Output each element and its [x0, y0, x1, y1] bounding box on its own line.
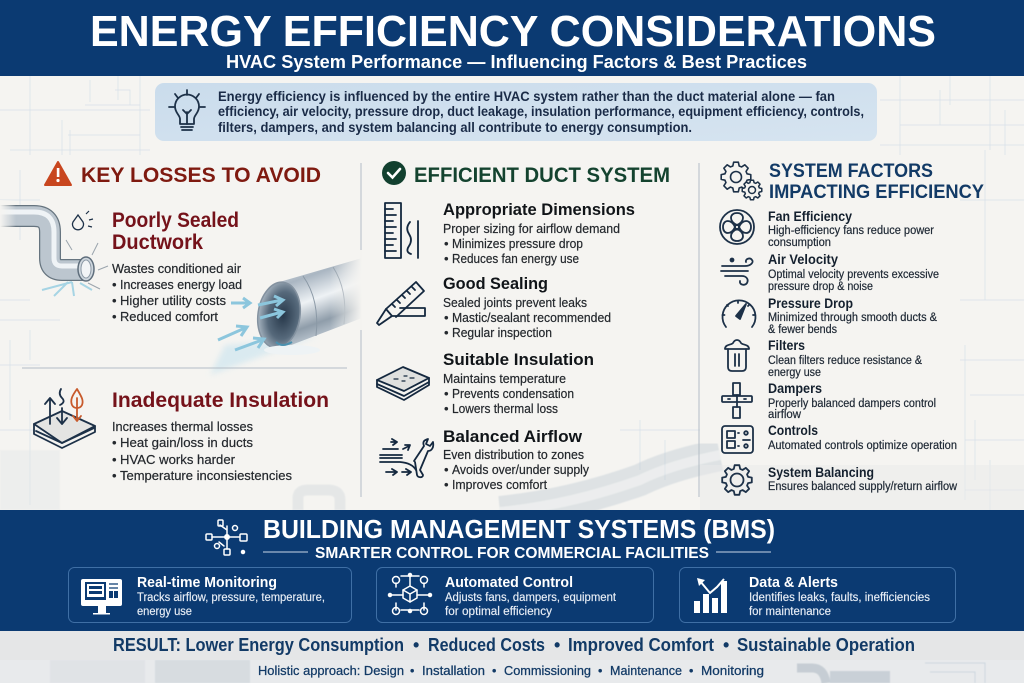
text: fan efficiency: Fan Efficiency [768, 209, 852, 224]
icon: automation network [388, 574, 432, 614]
text: fan efficiency [768, 209, 934, 249]
text: air velocity [768, 252, 939, 293]
result band: • [723, 635, 729, 655]
text: good sealing: Mastic/sealant recommended [452, 310, 611, 325]
heading: efficient duct system: EFFICIENT DUCT SYSTEM [414, 164, 670, 187]
text: balanced airflow: • [444, 462, 449, 477]
text: pressure drop: & fewer bends [768, 324, 837, 336]
text: inadequate insulation: • [112, 452, 117, 467]
text: suitable insulation: • [444, 401, 449, 416]
text: suitable insulation: Lowers thermal loss [452, 401, 558, 416]
heading: system factors impacting efficiency: IMPACTING EFFICIENCY [769, 181, 984, 203]
text: dampers: Dampers [768, 381, 822, 396]
card: automated control [376, 568, 654, 622]
icon: filter bin [725, 340, 749, 371]
text: appropriate dimensions: Appropriate Dimensions [443, 200, 635, 219]
text: filters: Filters [768, 338, 805, 353]
icon: insulation layers with heat arrows [34, 389, 95, 448]
text: controls [768, 423, 957, 452]
text: balanced airflow: Avoids over/under supply [452, 462, 589, 477]
icon: damper [722, 383, 752, 418]
text: filters [768, 338, 922, 379]
text: controls: Automated controls optimize operation [768, 440, 957, 452]
icon: check circle [382, 161, 406, 185]
result band: • [554, 635, 560, 655]
footer: holistic approach: Monitoring [701, 664, 764, 678]
text: appropriate dimensions: Proper sizing for airflow demand [443, 221, 620, 236]
card: real-time monitoring: energy use [137, 606, 192, 618]
text: suitable insulation [443, 350, 594, 416]
text: air velocity: pressure drop & noise [768, 281, 873, 293]
footer: holistic approach [258, 664, 764, 678]
text: appropriate dimensions [443, 200, 635, 266]
text: poorly sealed ductwork: Increases energy load [120, 277, 242, 292]
icon: insulation board [377, 367, 429, 400]
result band: RESULT: Lower Energy Consumption [113, 635, 404, 655]
text: pressure drop: Pressure Drop [768, 296, 853, 311]
text: good sealing [443, 274, 611, 340]
result band: Sustainable Operation [737, 635, 915, 655]
text: system balancing: Ensures balanced supply/return airflow [768, 481, 958, 493]
text: appropriate dimensions: Reduces fan energy use [452, 251, 579, 266]
text: inadequate insulation: Inadequate Insulation [112, 389, 329, 412]
text: controls: Controls [768, 423, 818, 438]
icon: control panel [722, 426, 753, 453]
illustration: leaking bent duct [0, 200, 108, 296]
text: inadequate insulation [112, 389, 329, 483]
text: balanced airflow [443, 427, 589, 492]
card: automated control: for optimal efficiency [445, 606, 552, 618]
icon: bar chart with alert arrow [694, 578, 727, 613]
intro text: Energy efficiency is influenced by the entire HVAC system rather than the duct material alone — fan [218, 89, 835, 104]
text: suitable insulation: • [444, 386, 449, 401]
text: good sealing: Sealed joints prevent leaks [443, 295, 587, 310]
panel: building management systems [0, 510, 1024, 631]
text: suitable insulation: Suitable Insulation [443, 350, 594, 369]
icon: fan [720, 210, 754, 244]
icon: sealant gun and ruler [377, 282, 425, 325]
text: dampers: Properly balanced dampers control [768, 398, 936, 410]
footer: holistic approach: • [598, 664, 602, 678]
text: poorly sealed ductwork: Higher utility costs [120, 293, 226, 308]
text: poorly sealed ductwork: Reduced comfort [120, 309, 218, 324]
text: filters: Clean filters reduce resistance & [768, 355, 922, 367]
text: good sealing: Good Sealing [443, 274, 548, 293]
footer: holistic approach: Holistic approach: Design [258, 664, 404, 678]
text: appropriate dimensions: Minimizes pressure drop [452, 236, 583, 251]
text: inadequate insulation: Temperature inconsiestencies [120, 468, 292, 483]
icon: warning triangle [45, 162, 71, 185]
intro text [218, 89, 864, 135]
card: real-time monitoring [68, 568, 352, 622]
text: appropriate dimensions: • [444, 251, 449, 266]
card: real-time monitoring: Tracks airflow, pressure, temperature, [137, 592, 325, 604]
result band: Improved Comfort [568, 635, 714, 655]
intro text: filters, dampers, and system balancing all contribute to energy consumption. [218, 120, 692, 135]
text: fan efficiency: High-efficiency fans reduce power [768, 225, 934, 237]
card: data and alerts: Identifies leaks, faults, inefficiencies [749, 592, 930, 604]
footer: holistic approach: Installation [422, 664, 485, 678]
heading: key losses: KEY LOSSES TO AVOID [81, 164, 321, 187]
text: air velocity: Air Velocity [768, 252, 838, 267]
footer: holistic approach: • [410, 664, 414, 678]
card: data and alerts: for maintenance [749, 606, 831, 618]
text: suitable insulation: Prevents condensation [452, 386, 574, 401]
icon: system balancing gear [722, 465, 752, 495]
text: good sealing: • [444, 325, 449, 340]
panel: key losses to avoid [0, 162, 362, 483]
card: data and alerts: Data & Alerts [749, 575, 838, 591]
heading: BMS: BUILDING MANAGEMENT SYSTEMS (BMS) [263, 514, 775, 544]
text: poorly sealed ductwork: Wastes conditioned air [112, 261, 242, 276]
text: balanced airflow: Even distribution to zones [443, 447, 584, 462]
text: poorly sealed ductwork: • [112, 309, 117, 324]
heading: system factors impacting efficiency: SYSTEM FACTORS [769, 160, 933, 182]
icon: pressure gauge [722, 300, 756, 327]
icon: network nodes [206, 520, 247, 555]
text: dampers: airflow [768, 409, 802, 421]
subtitle: HVAC System Performance — Influencing Factors & Best Practices [226, 51, 807, 72]
text: pressure drop: Minimized through smooth ducts & [768, 312, 937, 324]
text: poorly sealed ductwork: Poorly Sealed [112, 209, 239, 232]
text: inadequate insulation: • [112, 435, 117, 450]
panel: efficient duct system [377, 161, 670, 492]
text: system balancing: System Balancing [768, 465, 874, 480]
intro text: efficiency, air velocity, pressure drop, duct leakage, insulation performance, equipment efficiency, controls, [218, 104, 864, 119]
panel: system factors [720, 160, 984, 495]
text: balanced airflow: Improves comfort [452, 477, 547, 492]
header banner [0, 0, 1024, 76]
text: poorly sealed ductwork: Ductwork [112, 231, 203, 254]
result band: • [413, 635, 419, 655]
text: suitable insulation: Maintains temperature [443, 371, 566, 386]
icon: airflow and wrench [380, 439, 433, 477]
text: good sealing: • [444, 310, 449, 325]
heading: system factors impacting efficiency [769, 160, 984, 203]
footer: holistic approach: Commissioning [504, 664, 591, 678]
text: good sealing: Regular inspection [452, 325, 552, 340]
text: dampers [768, 381, 936, 421]
icon: monitor [81, 579, 122, 614]
text: inadequate insulation: • [112, 468, 117, 483]
card: real-time monitoring: Real-time Monitoring [137, 575, 277, 591]
result band [0, 631, 1024, 660]
text: fan efficiency: consumption [768, 237, 831, 249]
text: balanced airflow: Balanced Airflow [443, 427, 583, 446]
card: automated control: Adjusts fans, dampers, equipment [445, 592, 617, 604]
card: data and alerts [680, 568, 956, 622]
card: automated control: Automated Control [445, 575, 573, 591]
text: inadequate insulation: Heat gain/loss in ducts [120, 435, 254, 450]
illustration: open duct with air arrows [210, 250, 362, 375]
result band: Reduced Costs [428, 635, 545, 655]
text: pressure drop [768, 296, 937, 336]
title: ENERGY EFFICIENCY CONSIDERATIONS [90, 7, 936, 56]
text: poorly sealed ductwork [112, 209, 242, 324]
text: system balancing [768, 465, 958, 493]
text: air velocity: Optimal velocity prevents excessive [768, 269, 939, 281]
icon: light bulb [169, 90, 205, 130]
text: poorly sealed ductwork: • [112, 277, 117, 292]
text: inadequate insulation: Increases thermal losses [112, 419, 253, 434]
footer: holistic approach: Maintenance [610, 664, 682, 678]
icon: ruler [385, 203, 418, 258]
footer: holistic approach: • [492, 664, 496, 678]
text: appropriate dimensions: • [444, 236, 449, 251]
footer: holistic approach: • [689, 664, 693, 678]
icon: air velocity [721, 258, 753, 285]
icon: gears [721, 162, 762, 200]
intro callout [155, 83, 877, 141]
text: filters: energy use [768, 367, 821, 379]
text: inadequate insulation: HVAC works harder [120, 452, 236, 467]
subheading: BMS: SMARTER CONTROL FOR COMMERCIAL FACILITIES [315, 545, 709, 562]
text: poorly sealed ductwork: • [112, 293, 117, 308]
text: balanced airflow: • [444, 477, 449, 492]
